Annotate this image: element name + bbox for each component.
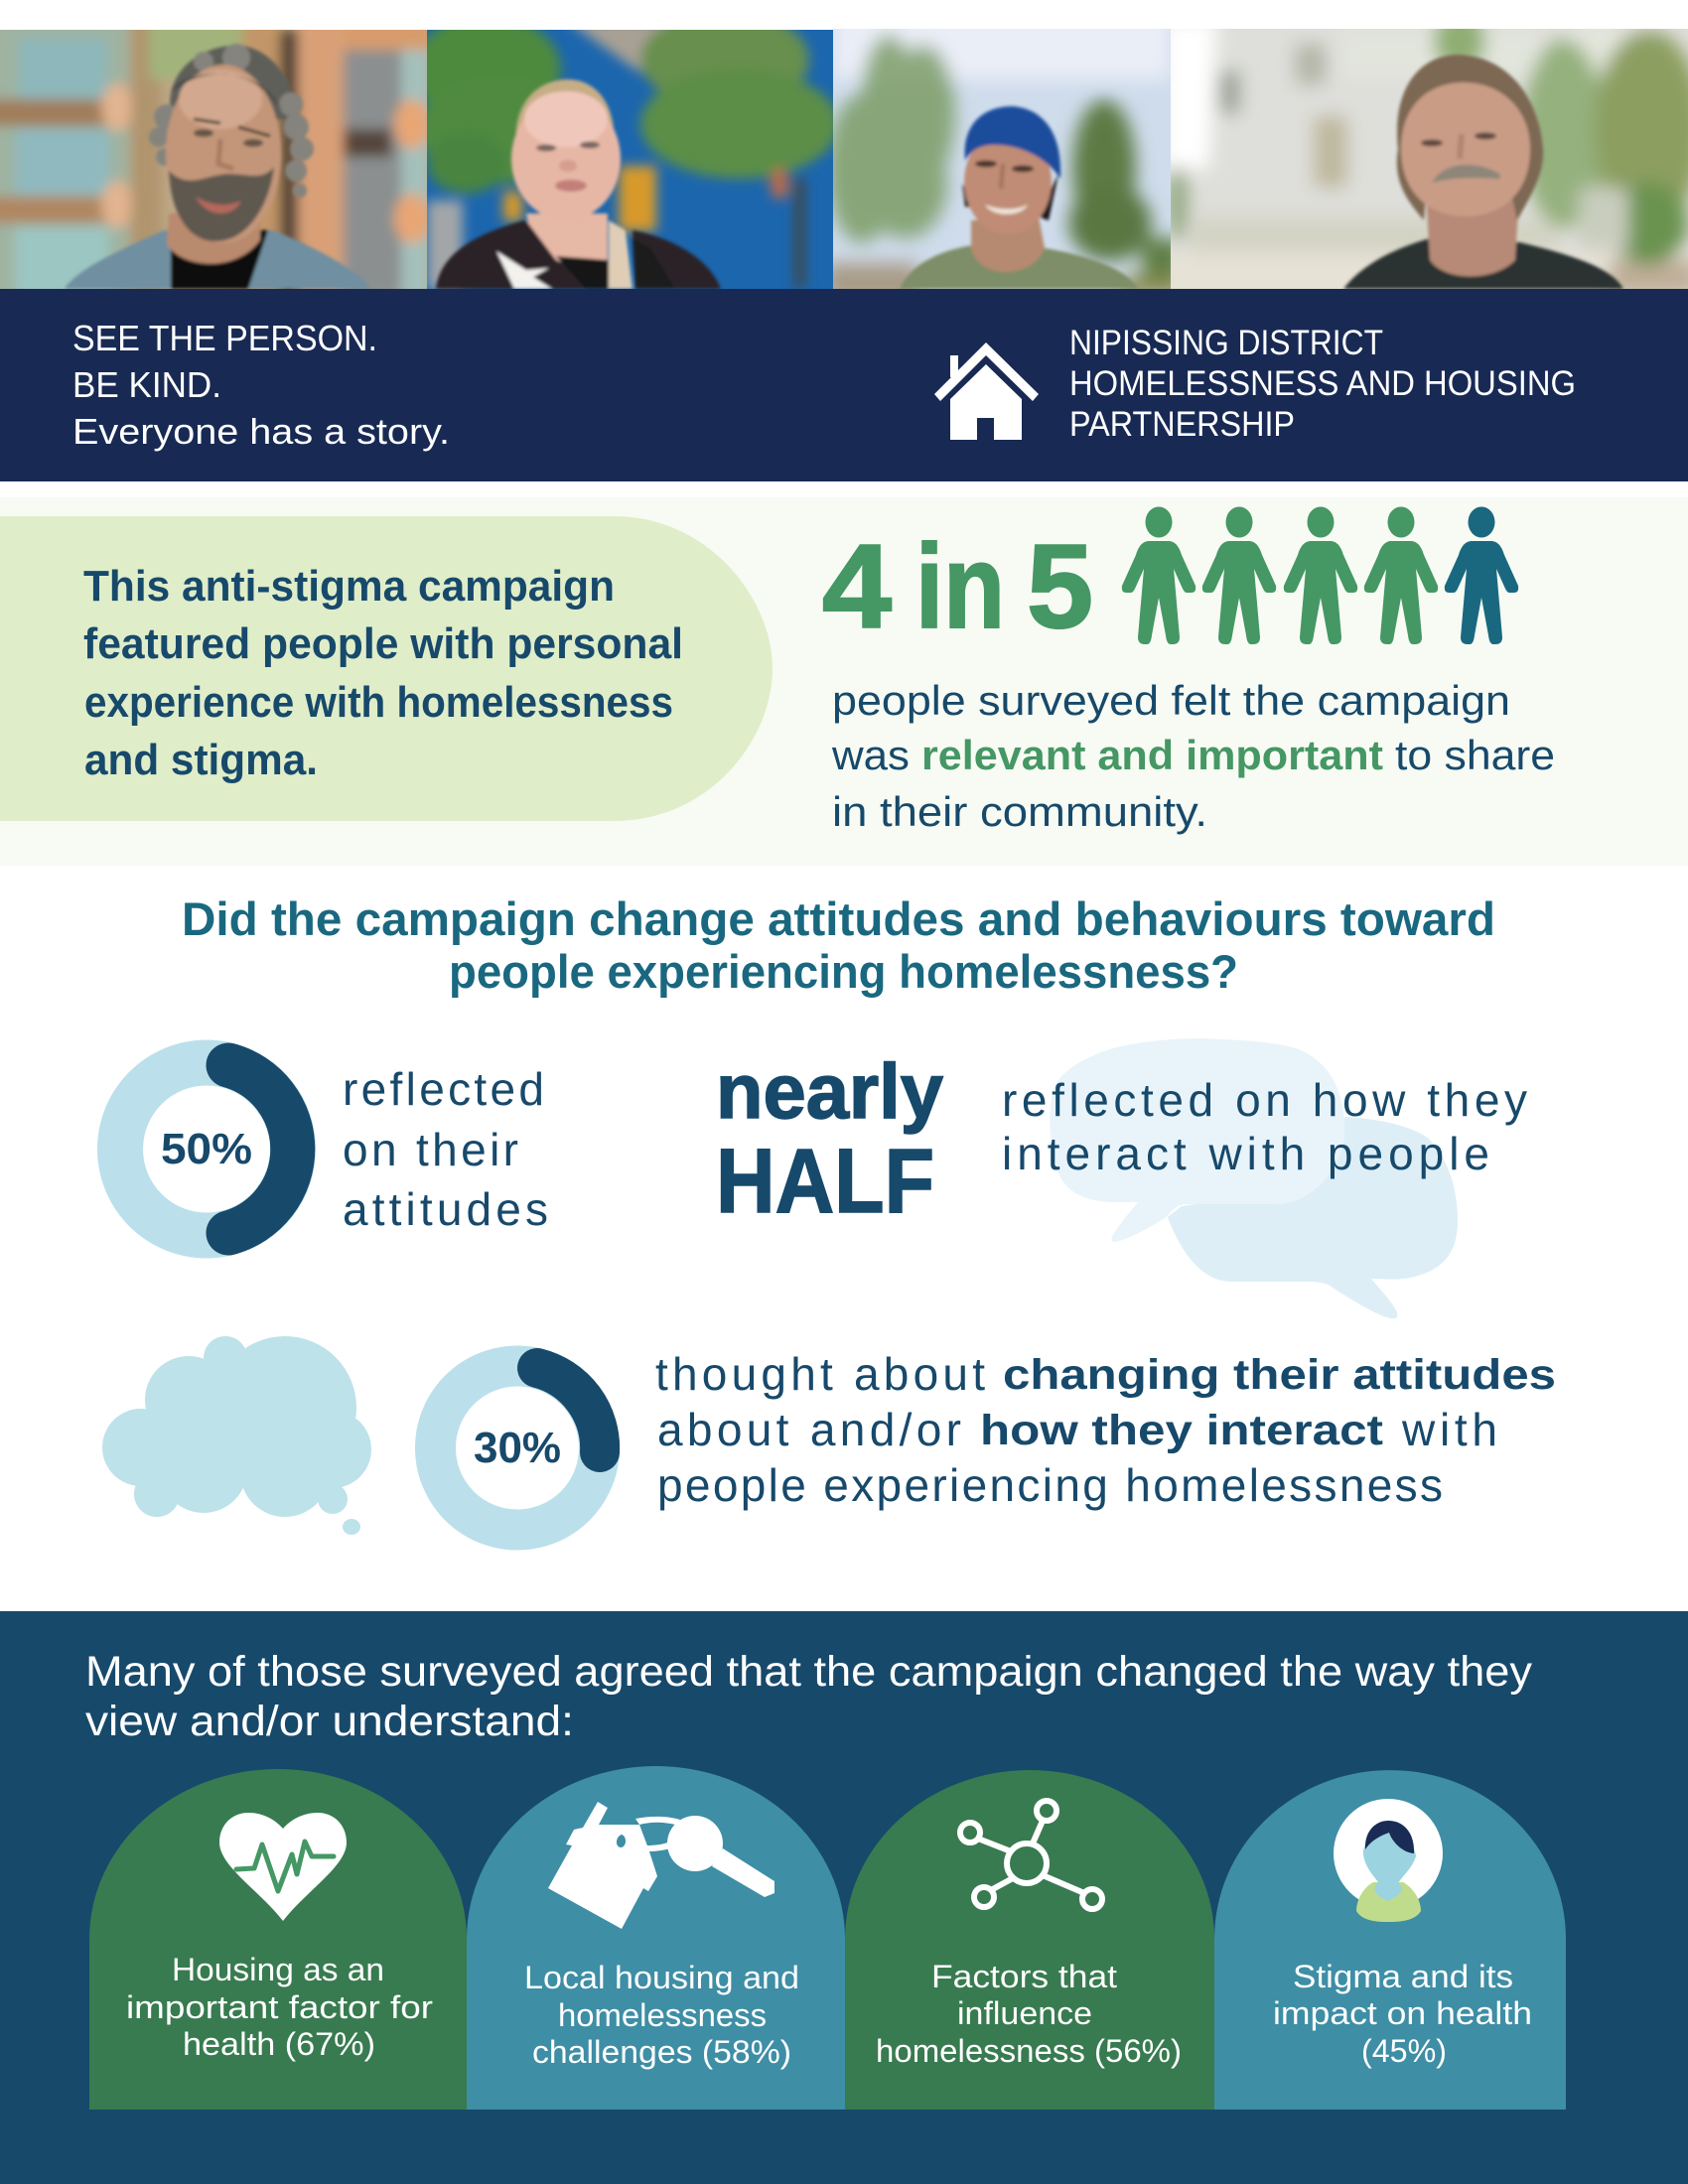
label: housing and health 67%: health (67%) (183, 2026, 375, 2062)
text block: thought about changing attitudes: people experiencing homelessness (657, 1459, 1443, 1511)
label: factors 56%: Factors that (931, 1959, 1117, 1994)
campaign slogan: SEE THE PERSON. (72, 318, 377, 358)
partnership name: HOMELESSNESS AND HOUSING (1069, 364, 1576, 403)
campaign slogan (72, 318, 450, 452)
label: stigma 45%: Stigma and its (1293, 1959, 1513, 1994)
text block: reflected on their attitudes (343, 1063, 548, 1235)
icon: white house logo (934, 342, 1039, 440)
icon: two speech bubbles (1050, 1038, 1458, 1318)
callout: green pill background (0, 516, 773, 821)
photo: older man with moustache and dark t-shirt (1171, 29, 1688, 289)
statistic: nearly half: HALF (716, 1131, 934, 1232)
photo: man in blue cap and green t-shirt (833, 29, 1171, 289)
text block: survey result (831, 677, 1555, 835)
text block: campaign description (83, 562, 683, 784)
text block: survey result: in their community. (832, 788, 1207, 835)
text block: campaign description: and stigma. (84, 736, 318, 784)
icon: person portrait (1334, 1799, 1443, 1922)
statistic: nearly half: nearly (716, 1047, 943, 1135)
heading: attitudes and behaviours question (182, 892, 1495, 998)
text block: thought about changing attitudes: how they interact (980, 1407, 1383, 1454)
text block: thought about changing attitudes: about and/or (657, 1404, 961, 1455)
statistic: 4 in 5: in (915, 520, 1005, 653)
text block: reflected on their attitudes: reflected (343, 1063, 544, 1115)
text block: reflected on how they interact: interact with people (1002, 1128, 1489, 1179)
panel: local housing arch (467, 1766, 845, 2110)
text block: survey result: relevant and important (921, 732, 1383, 778)
label: factors 56% (876, 1959, 1182, 2069)
label: factors 56%: homelessness (56%) (876, 2033, 1182, 2069)
label: local housing 58%: Local housing and (524, 1960, 799, 1995)
text block: survey result: was (831, 732, 910, 778)
label: housing and health 67%: Housing as an (172, 1952, 384, 1987)
heading: attitudes and behaviours question: people experiencing homelessness? (449, 945, 1238, 998)
statistic: nearly half (716, 1047, 943, 1232)
statistic: 4 in 5: 4 (822, 520, 892, 653)
text block: campaign description: featured people with personal (83, 619, 683, 668)
banner: navy campaign band (0, 289, 1688, 481)
text block: reflected on their attitudes: attitudes (343, 1183, 548, 1235)
panel: campaign understanding results (0, 1611, 1688, 2184)
text block: survey result: to share (1395, 732, 1555, 778)
text block: reflected on how they interact (1002, 1074, 1527, 1179)
text block: reflected on how they interact: reflected on how they (1002, 1074, 1527, 1126)
icon: thought cloud (102, 1336, 371, 1535)
label: factors 56%: influence (957, 1995, 1092, 2031)
label: local housing 58% (524, 1960, 799, 2070)
campaign slogan: Everyone has a story. (72, 411, 450, 452)
text block: section intro (85, 1648, 1533, 1745)
partnership name (1069, 324, 1576, 444)
panel: housing and health arch (89, 1769, 467, 2110)
chart: 30% donut (435, 1366, 600, 1530)
label: stigma 45% (1273, 1959, 1532, 2069)
text block: thought about changing attitudes: thought about (655, 1348, 985, 1400)
text block: reflected on their attitudes: on their (343, 1124, 518, 1175)
text block: survey result: people surveyed felt the campaign (832, 677, 1510, 724)
photo: man with grey curly hair and denim jacket (0, 30, 427, 289)
statistic: 4 in 5 (822, 520, 1093, 653)
label: local housing 58%: homelessness (558, 1997, 767, 2033)
text block: campaign description: This anti-stigma campaign (83, 562, 615, 611)
text block: thought about changing attitudes: changing their attitudes (1003, 1351, 1556, 1399)
label: local housing 58%: challenges (58%) (532, 2034, 791, 2070)
icon: five people, four green and one teal (1122, 506, 1518, 644)
chart: 50% donut: 50% (161, 1125, 252, 1173)
icon: heart with pulse (219, 1813, 347, 1921)
icon: network of nodes (960, 1801, 1102, 1909)
text block: section intro: Many of those surveyed agreed that the campaign changed the way they (85, 1648, 1533, 1696)
text block: thought about changing attitudes (655, 1348, 1556, 1511)
statistic: 4 in 5: 5 (1027, 520, 1093, 653)
panel: campaign relevance section (0, 497, 1688, 866)
label: stigma 45%: impact on health (1273, 1995, 1532, 2031)
photo: woman with blonde hair and dark cardigan (427, 30, 833, 289)
campaign slogan: BE KIND. (72, 364, 221, 405)
icon: house tag and key (548, 1802, 774, 1929)
partnership name: PARTNERSHIP (1069, 405, 1295, 444)
label: housing and health 67%: important factor for (126, 1989, 433, 2025)
text block: campaign description: experience with homelessness (84, 678, 673, 727)
text block: section intro: view and/or understand: (85, 1698, 574, 1745)
partnership name: NIPISSING DISTRICT (1069, 324, 1383, 362)
heading: attitudes and behaviours question: Did the campaign change attitudes and behaviours toward (182, 892, 1495, 945)
panel: factors arch (845, 1770, 1214, 2110)
chart: 50% donut (120, 1062, 293, 1235)
label: housing and health 67% (126, 1952, 433, 2062)
chart: 30% donut: 30% (474, 1424, 561, 1472)
label: stigma 45%: (45%) (1361, 2033, 1447, 2069)
text block: thought about changing attitudes: with (1401, 1404, 1497, 1455)
panel: stigma arch (1214, 1770, 1566, 2110)
